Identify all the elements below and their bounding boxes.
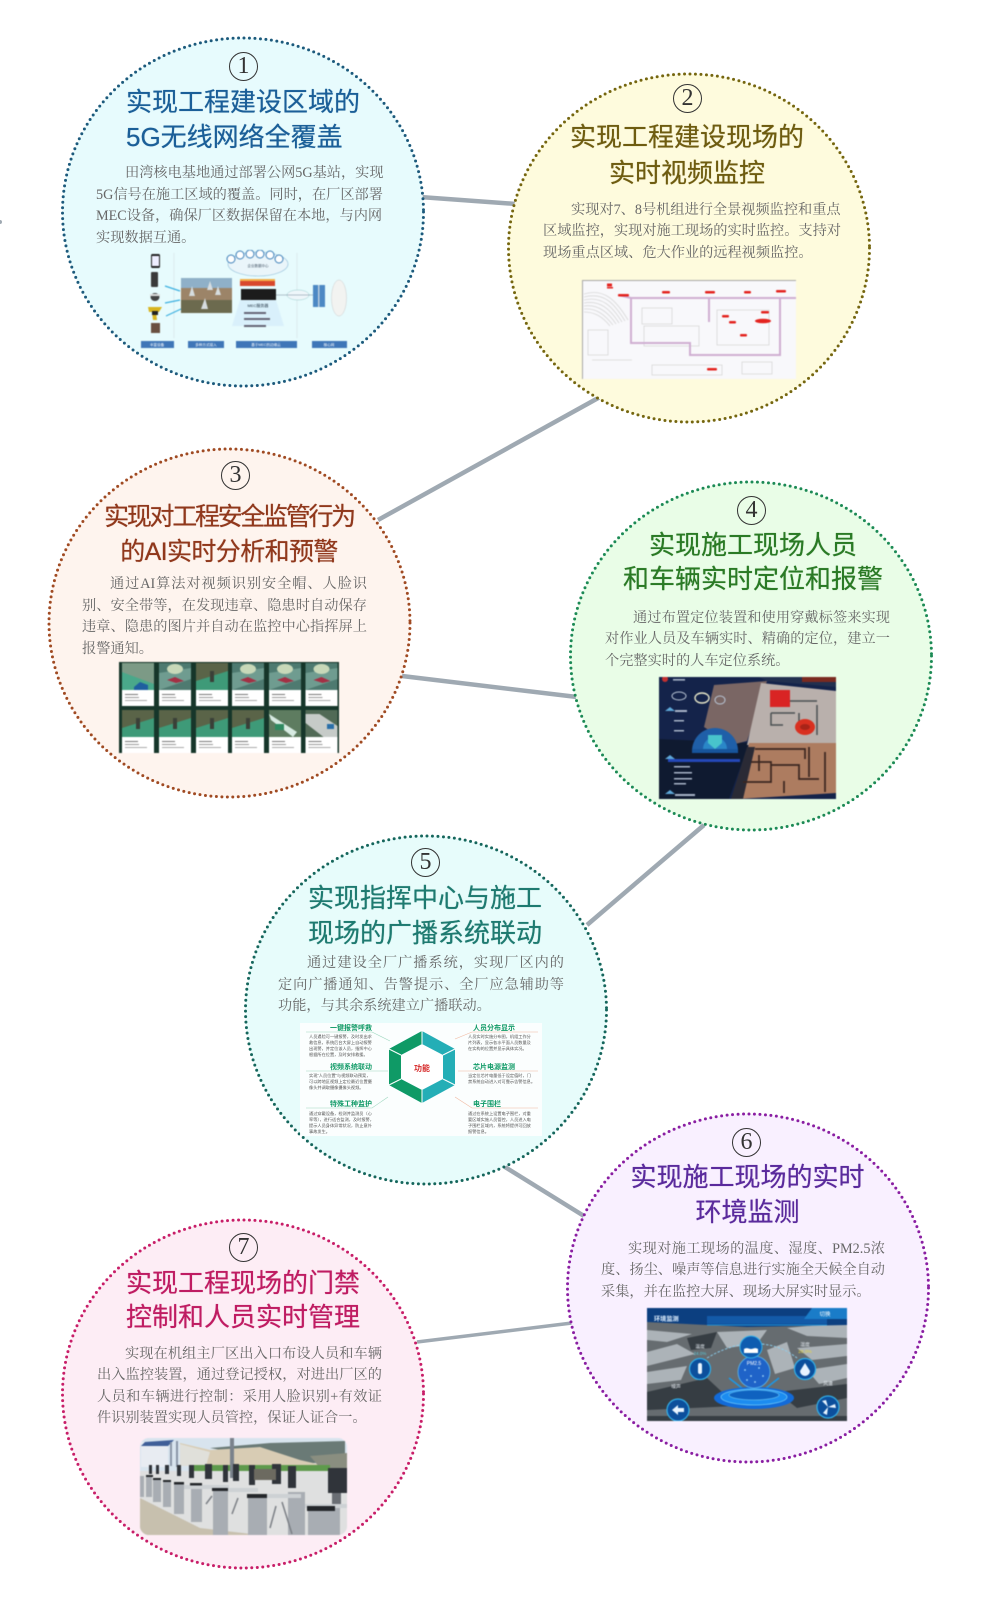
diagram: broadcast functions hexagon: 禁系统自动进入对可靠示告警信息。 [468,1078,535,1085]
image: environment monitoring screen: 风速 [823,1381,833,1387]
image: environment monitoring screen: 切换 [819,1310,831,1318]
text block 4: 对作业人员及车辆实时、精确的定位，建立一 [605,631,890,647]
diagram: broadcast functions hexagon: 根据所在位置，及时安排救援。 [309,1051,368,1058]
image: environment monitoring screen: PM2.5 [747,1361,761,1367]
heading 6: 环境监测 [695,1196,800,1226]
heading 4 [623,530,883,594]
text block 4: 通过布置定位装置和使用穿戴标签来实现 [633,610,890,626]
text block 3: 通过AI算法对视频识别安全帽、人脸识 [110,576,367,592]
heading 4: 实现施工现场人员 [649,530,857,560]
number badge 4: 4 [746,497,758,523]
image: positioning screen [658,676,837,800]
diagram: broadcast functions hexagon: 事故发生。 [309,1128,330,1135]
diagram: broadcast functions hexagon: 实现“人员位置”与视频联动预案， [309,1072,370,1079]
panel: 2 video monitoring [507,72,871,424]
diagram: site camera plan [582,280,796,380]
number badge 5 [411,848,440,877]
diagram: 5G network architecture: 企业数据中心 [248,263,269,268]
diagram: broadcast functions hexagon: 芯片电源监测 [473,1062,515,1071]
heading 5: 实现指挥中心与施工 [308,882,542,912]
text block 6: 度、扬尘、噪声等信息进行实施全天候全自动 [601,1262,885,1278]
diagram: broadcast functions hexagon: 像头并调取摄像摄像头视频。 [309,1084,363,1091]
panel: 3 AI analysis [48,448,412,798]
text block 5 [278,954,564,1014]
text block 1: 实现数据互通。 [96,230,195,246]
image: environment monitoring screen: 湿度 [800,1341,810,1348]
hexagon with centre label: 功能 [414,1063,430,1073]
image: environment monitoring screen: 温度 [695,1343,705,1350]
text block 6 [601,1240,885,1300]
number badge 7: 7 [238,1234,250,1260]
heading 7: 控制和人员实时管理 [126,1302,360,1332]
heading 2 [570,122,804,188]
panel: 7 access control [61,1218,425,1570]
number badge 3: 3 [230,462,242,488]
diagram: 5G network architecture: MEC服务器 [248,302,268,308]
text block 2: 现场重点区域、危大作业的远程视频监控。 [543,244,813,260]
diagram: broadcast functions hexagon: 子围栏区域内，系统将提供可回放 [468,1122,532,1129]
text block 1: 田湾核电基地通过部署公网5G基站，实现 [125,165,384,181]
image: environment monitoring screen: 噪声 [671,1383,681,1390]
number badge 2: 2 [682,85,694,111]
diagram: broadcast functions hexagon: 通过穿戴设备，检测并监测员（心 [309,1110,373,1117]
diagram: broadcast functions hexagon: 一键报警呼救 [330,1023,372,1032]
diagram: broadcast functions hexagon: 视频系统联动 [330,1062,372,1071]
heading 7 [126,1268,360,1332]
number badge 1 [229,52,258,81]
text block 1 [96,164,384,246]
text block 2: 区域监控，实现对施工现场的实时监控。支持对 [543,223,841,239]
text block 2: 实现对7、8号机组进行全景视频监控和重点 [571,202,841,218]
heading 1: 实现工程建设区域的 [126,86,360,116]
text block 7: 实现在机组主厂区出入口布设人员和车辆 [125,1346,382,1362]
heading 3 [104,502,354,566]
text block 6: 采集，并在监控大屏、现场大屏实时显示。 [601,1284,871,1300]
number badge 1: 1 [238,53,250,79]
text block 4 [605,610,890,669]
number badge 4 [737,496,766,525]
number badge 7 [229,1232,258,1262]
diagram: broadcast functions hexagon: 在实构的位置并显示具体实况。 [468,1045,527,1052]
text block 5: 定向广播通知、告警提示、全厂应急辅助等 [278,977,564,993]
hexagon with centre label [389,1031,455,1103]
text block 3: 别、安全带等，在发现违章、隐患时自动保存 [82,598,367,614]
text block 5: 功能，与其余系统建立广播联动。 [278,998,491,1014]
diagram: broadcast functions hexagon: 救信息，系统后台大屏上自动报警 [309,1039,373,1046]
heading 5 [308,882,542,948]
diagram: broadcast functions hexagon: 提示人员身体异常状况，防止意外 [309,1122,373,1129]
heading 7: 实现工程现场的门禁 [126,1268,360,1298]
diagram: broadcast functions hexagon: 人员实时实施分布图，机组工作分 [468,1033,532,1040]
diagram: broadcast functions hexagon: 出现警，并定位该人员，指挥中心 [309,1045,373,1052]
heading 1: 5G无线网络全覆盖 [126,122,343,152]
panel: 6 environment [566,1112,930,1464]
diagram: 5G network architecture: 核心网 [324,342,335,347]
heading 4: 和车辆实时定位和报警 [623,564,883,594]
text block 7: 人员和车辆进行控制：采用人脸识别+有效证 [97,1389,382,1405]
number badge 6 [732,1128,761,1157]
panel: 5 broadcast [244,834,608,1186]
text block 5: 通过建设全厂广播系统，实现厂区内的 [307,955,564,971]
diagram: 5G network architecture: 多种方式接入 [195,342,217,347]
panel: 1 5G coverage [61,36,425,388]
diagram: 5G network architecture [140,249,348,349]
diagram: 5G network architecture: 基于MEC的边缘云 [251,342,281,347]
diagram: broadcast functions hexagon: 要区域实施人员管控，人员进入电 [468,1116,532,1123]
text block 7 [97,1346,382,1426]
panel: 4 positioning [569,480,933,832]
heading 3: 实现对工程安全监管行为 [104,502,354,530]
heading 5: 现场的广播系统联动 [308,918,542,948]
diagram: 5G network architecture: 丰富设备 [150,342,165,347]
diagram: broadcast functions hexagon: 特殊工种监护 [330,1099,372,1108]
diagram: broadcast functions hexagon: 率等），进行适合监测，及时报警， [309,1116,374,1123]
number badge 5: 5 [420,849,432,875]
diagram: broadcast functions hexagon: 片列表，显示各水平面人员数量及 [468,1039,532,1046]
image: AI alarm photo grid [118,661,340,754]
text block 2 [543,202,841,260]
text block 7: 出入监控装置，通过登记授权，对进出厂区的 [97,1367,382,1383]
text block 6: 实现对施工现场的温度、湿度、PM2.5浓 [628,1241,885,1257]
image: environment monitoring screen: 28.0% [798,1349,813,1355]
number badge 3 [221,461,250,490]
image: environment monitoring screen: 环境监测 [654,1315,679,1323]
image: environment monitoring screen [646,1307,848,1422]
number badge 6: 6 [740,1129,752,1155]
heading 2: 实现工程建设现场的 [570,122,804,152]
heading 3: 的AI实时分析和预警 [120,538,338,566]
diagram: broadcast functions hexagon [300,1023,542,1136]
diagram: broadcast functions hexagon: 可以跨地区视频上定位最近位置摄 [309,1078,373,1085]
text block 3 [82,576,367,657]
number badge 2 [673,84,702,113]
text block 7: 件识别装置实现人员管控，保证人证合一。 [97,1410,367,1426]
heading 1 [126,86,360,152]
diagram: broadcast functions hexagon: 人员遇险可一键报警，及时发出求 [309,1033,373,1040]
diagram: broadcast functions hexagon: 通过在系统上设置电子围栏，对重 [468,1110,531,1117]
text block 3: 违章、隐患的图片并自动在监控中心指挥屏上 [82,619,367,635]
diagram: broadcast functions hexagon: 报警信息。 [468,1128,489,1135]
diagram: broadcast functions hexagon: 当定位芯片电量低于设定值时，门 [468,1072,531,1079]
text block 3: 报警通知。 [82,641,153,657]
heading 6: 实现施工现场的实时 [630,1162,864,1192]
diagram: broadcast functions hexagon: 人员分布显示 [473,1023,515,1032]
heading 6 [630,1162,864,1226]
image: turnstile gates photo [140,1437,348,1536]
text block 4: 个完整实时的人车定位系统。 [605,653,789,669]
text block 1: 5G信号在施工区域的覆盖。同时，在厂区部署 [96,186,383,202]
heading 2: 实时视频监控 [609,158,765,188]
image: environment monitoring screen: 24.0% [694,1351,706,1356]
text block 1: MEC设备，确保厂区数据保留在本地，与内网 [96,208,382,224]
diagram: broadcast functions hexagon: 电子围栏 [473,1099,501,1108]
